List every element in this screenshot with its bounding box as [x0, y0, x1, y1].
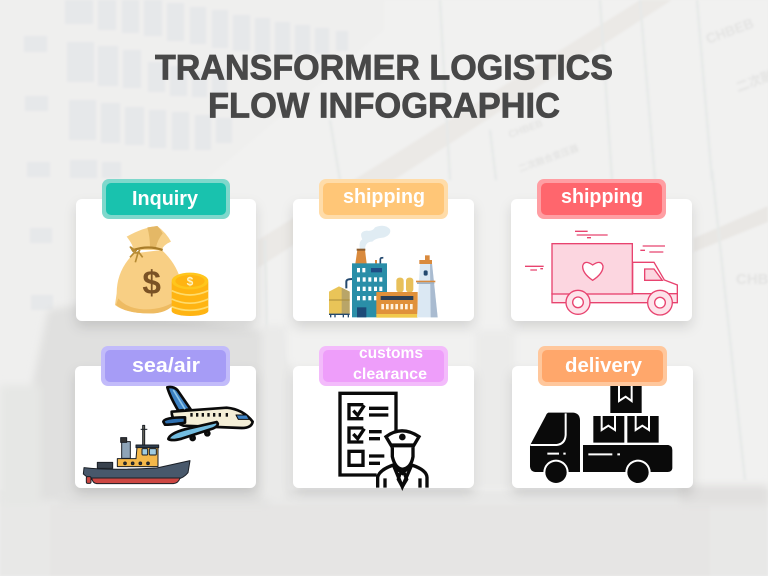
label: shipping (orange): shipping	[343, 186, 425, 208]
icon: pink truck with heart	[525, 231, 677, 315]
label: Inquiry	[102, 179, 230, 219]
icon: money bag and coins: $	[187, 274, 194, 288]
label: delivery: delivery	[565, 355, 643, 377]
icon: black delivery truck with boxes	[530, 386, 672, 485]
icon: factory	[329, 226, 438, 318]
label: customs clearance: customs	[359, 345, 423, 362]
label: customs clearance	[319, 345, 448, 386]
background lettering: CHBEB marks on the crates: 二次融合变压器	[517, 142, 580, 174]
panel: customs clearance	[293, 345, 474, 488]
title	[155, 48, 613, 126]
icon: money bag and coins: $	[142, 265, 161, 302]
panel: inquiry	[76, 179, 256, 321]
icon: ship	[83, 425, 190, 484]
background lettering: CHBEB marks on the crates: CHB	[736, 271, 768, 288]
icon: money bag and coins	[115, 226, 208, 316]
label: sea/air	[101, 346, 230, 386]
title: FLOW INFOGRAPHIC	[208, 86, 560, 126]
panel: delivery	[512, 346, 693, 488]
label: delivery	[538, 346, 667, 386]
label: shipping (red)	[537, 179, 666, 219]
panel: sea and air	[75, 346, 256, 488]
label: shipping (orange)	[319, 179, 448, 219]
title: TRANSFORMER LOGISTICS	[155, 48, 613, 88]
label: customs clearance: clearance	[353, 366, 427, 383]
icon: customs officer and checklist	[340, 393, 427, 488]
background lettering: CHBEB marks on the crates: CHBEB	[507, 118, 544, 141]
label: Inquiry: Inquiry	[132, 188, 199, 210]
background lettering: CHBEB marks on the crates: CHBEB	[704, 15, 756, 47]
label: shipping (red): shipping	[561, 186, 643, 208]
panel: factory	[293, 179, 474, 321]
label: sea/air: sea/air	[132, 355, 200, 377]
icon: airplane	[163, 387, 253, 440]
background lettering: CHBEB marks on the crates	[507, 15, 768, 288]
panel: delivery truck outline	[511, 179, 692, 321]
